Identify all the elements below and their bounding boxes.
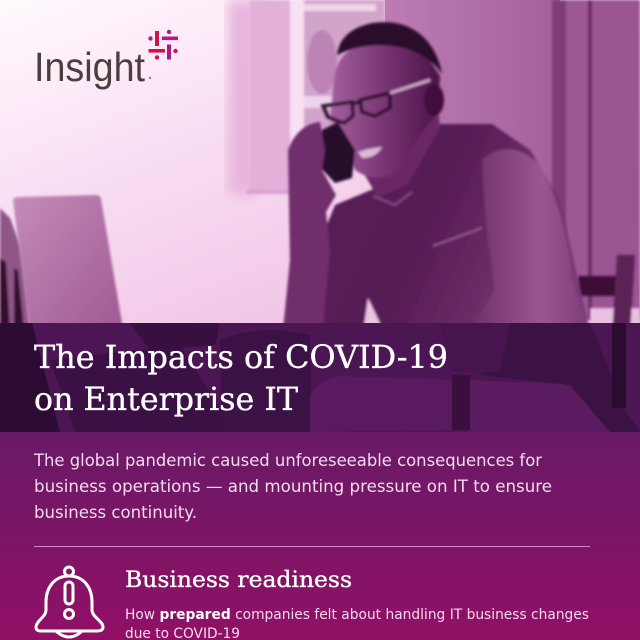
title: on Enterprise IT	[34, 380, 299, 418]
intro text: business operations — and mounting pressure on IT to ensure	[34, 477, 552, 497]
logo registered dot	[149, 77, 151, 79]
section heading: Business readiness	[125, 568, 352, 593]
hero photo: man on phone at laptop	[0, 0, 640, 340]
intro text	[33, 451, 552, 523]
title band	[0, 323, 640, 432]
man	[282, 22, 592, 340]
glasses	[323, 93, 390, 123]
wall alcove shadow	[228, 0, 305, 195]
hair	[337, 22, 442, 74]
ear	[424, 84, 444, 116]
plant	[0, 208, 30, 330]
curtain	[552, 0, 640, 320]
sleeve	[465, 149, 592, 340]
chair	[578, 255, 640, 335]
section description: How prepared companies felt about handling IT business changes	[125, 607, 589, 623]
logo mark	[148, 30, 178, 60]
pocket seam	[433, 228, 482, 246]
logo wordmark: Insight	[34, 44, 146, 90]
torso	[282, 124, 592, 340]
title: The Impacts of COVID-19	[34, 338, 448, 376]
band photo: laptop and desk	[0, 323, 640, 432]
intro text: business continuity.	[34, 503, 197, 523]
glasses temple	[390, 80, 430, 93]
face	[330, 44, 440, 178]
neck	[362, 108, 440, 198]
collar	[373, 192, 412, 205]
hand and arm	[282, 122, 336, 340]
section description	[125, 607, 589, 640]
bookshelf	[304, 0, 390, 140]
title	[34, 338, 448, 418]
logo: Insight	[34, 30, 178, 90]
lower panel	[0, 432, 640, 640]
right wall	[385, 0, 560, 330]
intro text: The global pandemic caused unforeseeable consequences for	[33, 451, 542, 471]
phone	[318, 122, 355, 183]
table light gap	[362, 298, 388, 340]
laptop screen	[13, 195, 124, 335]
icon: alert bell	[36, 567, 103, 637]
mouth	[358, 147, 382, 158]
